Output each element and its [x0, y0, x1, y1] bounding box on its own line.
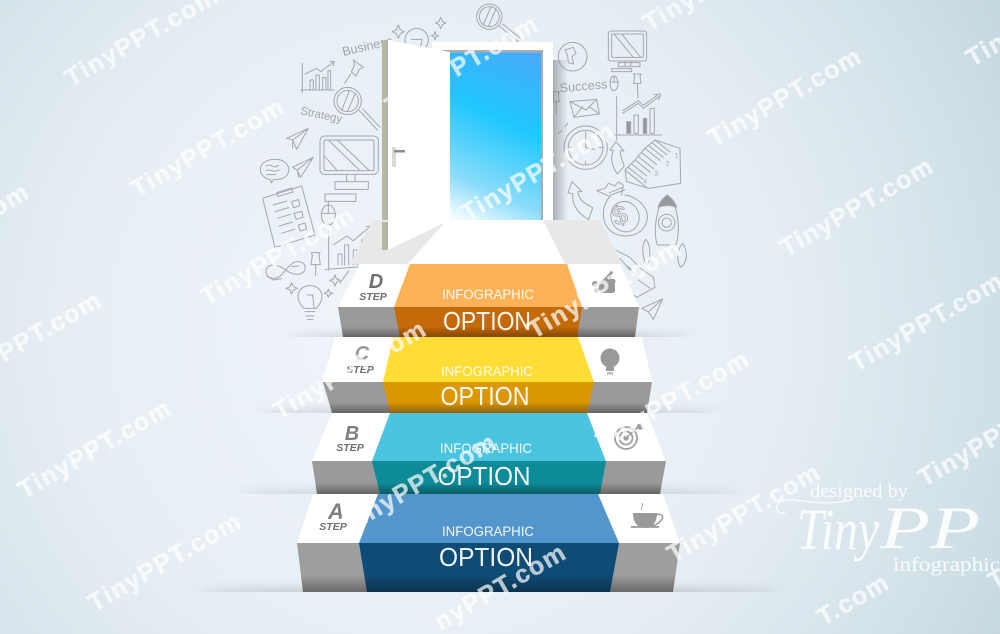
doodle: lower paper plane — [642, 299, 663, 319]
watermarks: TinyPPT.com — [662, 458, 826, 568]
opening inner shade — [442, 50, 543, 220]
watermarks: TinyPPT.com — [196, 201, 360, 311]
white path — [408, 220, 565, 264]
step D top — [338, 264, 639, 307]
step A text: INFOGRAPHIC — [442, 523, 534, 539]
signature: designed by TinyPPT: infographic — [893, 554, 1000, 576]
step B text — [438, 440, 532, 491]
step A text: OPTION — [439, 542, 533, 572]
step A label — [319, 499, 348, 533]
step A label: STEP — [319, 521, 348, 533]
doodle: top bulb and sparkles — [392, 17, 446, 52]
icon: target — [615, 423, 644, 449]
watermarks: TinyPPT.com — [591, 345, 755, 455]
step B top — [312, 413, 666, 461]
step C text — [440, 363, 533, 411]
step B — [312, 413, 666, 494]
open door leaf edge — [382, 40, 388, 250]
doodle: globe — [558, 42, 587, 71]
watermarks: TinyPPT.com — [703, 42, 867, 152]
floor landing — [350, 220, 622, 264]
doodle: up arrow — [610, 142, 624, 174]
step D text: OPTION — [443, 306, 531, 336]
step B text: OPTION — [438, 461, 530, 491]
step C text: INFOGRAPHIC — [441, 363, 533, 379]
door — [382, 40, 553, 250]
icon: lightbulb — [600, 348, 620, 374]
watermarks: TinyPPT.com — [13, 394, 177, 504]
doodle: stair numbers: 1 — [675, 152, 679, 159]
doodle: curved arrow — [568, 182, 593, 220]
step A front — [297, 543, 680, 592]
step C text: OPTION — [440, 381, 530, 411]
doodle: dollar sign: $ — [608, 199, 632, 232]
doodle: lower bulb and sparkles — [286, 271, 349, 319]
step C label — [346, 343, 375, 376]
watermarks: TinyPPT.com — [775, 152, 939, 262]
doodle: rocket — [643, 195, 686, 267]
watermarks: TinyPPT.com — [456, 117, 620, 227]
doodle: right mouse and pin — [610, 74, 641, 98]
step B front — [312, 461, 666, 494]
doodle: stair numbers: 4 — [643, 179, 647, 186]
doodle: left magnifier — [334, 87, 380, 130]
step D text: INFOGRAPHIC — [442, 286, 534, 302]
step shadows — [198, 334, 778, 598]
doodle: money bag — [597, 182, 647, 236]
doodle: infinity — [266, 262, 305, 280]
step D — [338, 264, 639, 337]
doodle: hidden pin beside door — [553, 92, 559, 114]
watermarks: TinyPPT.com — [126, 93, 290, 203]
doodle: top magnifier — [477, 4, 521, 42]
doodle: stair numbers: 3 — [654, 170, 658, 177]
step C front — [323, 382, 652, 413]
doodle: numbered stairs — [625, 140, 681, 188]
watermarks: TinyPPT.com — [338, 428, 502, 538]
open door leaf — [388, 40, 450, 250]
step C label: STEP — [346, 364, 375, 376]
signature: designed by TinyPPT: PP — [879, 495, 980, 561]
doodle: mouse — [321, 201, 335, 225]
doodle: large monitor — [320, 136, 378, 201]
step B text: INFOGRAPHIC — [440, 440, 532, 456]
step D front — [338, 307, 639, 337]
doodle: lower stairs — [617, 251, 655, 297]
step B teal band — [372, 413, 606, 461]
doodle: envelope — [570, 99, 599, 117]
door frame shadow — [553, 60, 568, 220]
step C yellow band — [383, 337, 594, 382]
step D text — [442, 286, 534, 336]
doodle: stair numbers — [643, 152, 679, 186]
doodle: paper plane one — [287, 128, 308, 149]
door leaf over floor — [382, 222, 388, 250]
step A blue band — [359, 494, 619, 543]
doodle: strategy label: Strategy — [299, 105, 343, 126]
doodle: business label: Business — [341, 34, 394, 59]
watermarks: TinyPPT.com — [268, 315, 432, 425]
step B label: B — [345, 423, 359, 445]
step B label: STEP — [336, 442, 365, 454]
doodle: right top monitor — [608, 31, 647, 72]
doodle: lower left chart — [325, 226, 370, 271]
watermarks: TinyPPT.com — [380, 10, 544, 120]
signature: designed by TinyPPT: Tiny — [797, 497, 879, 562]
door handle — [392, 147, 405, 167]
doodle: speech bubble — [260, 159, 289, 183]
doodle: clock — [558, 123, 607, 169]
watermarks: nyPPT.com — [430, 538, 572, 634]
icon: coffee cup — [631, 503, 663, 528]
step D label: D — [369, 271, 383, 293]
step A — [297, 494, 680, 592]
signature: designed by TinyPPT: designed by — [810, 481, 909, 502]
watermarks: T.com — [812, 568, 894, 632]
door frame — [432, 42, 553, 220]
step C — [323, 337, 652, 413]
step C top — [323, 337, 652, 382]
step A label: A — [327, 499, 344, 524]
sky opening — [450, 52, 541, 220]
step D orange band — [394, 264, 582, 307]
doodle: success label: Success — [559, 77, 608, 95]
doodle: clipboard checklist — [263, 186, 315, 247]
doodle: left bar chart — [301, 61, 334, 93]
doodle: lower pin — [311, 253, 320, 275]
doodle: right bar chart — [615, 94, 662, 140]
doodle: paper plane two — [292, 157, 313, 177]
step B label — [336, 423, 365, 454]
doodle: pushpin — [345, 60, 363, 83]
step A text — [439, 523, 534, 572]
step D label — [359, 271, 388, 303]
step D label: STEP — [359, 291, 388, 303]
signature: designed by TinyPPT — [776, 481, 1000, 576]
step A top — [297, 494, 680, 543]
watermarks: TinyPPT.com — [523, 234, 687, 344]
icon: thumbs up — [592, 271, 616, 293]
doodle cluster: business sketches — [260, 4, 686, 319]
doodle: stair numbers: 2 — [666, 160, 670, 167]
watermarks: TinyPPT.com — [83, 507, 247, 617]
step C label: C — [355, 343, 370, 365]
